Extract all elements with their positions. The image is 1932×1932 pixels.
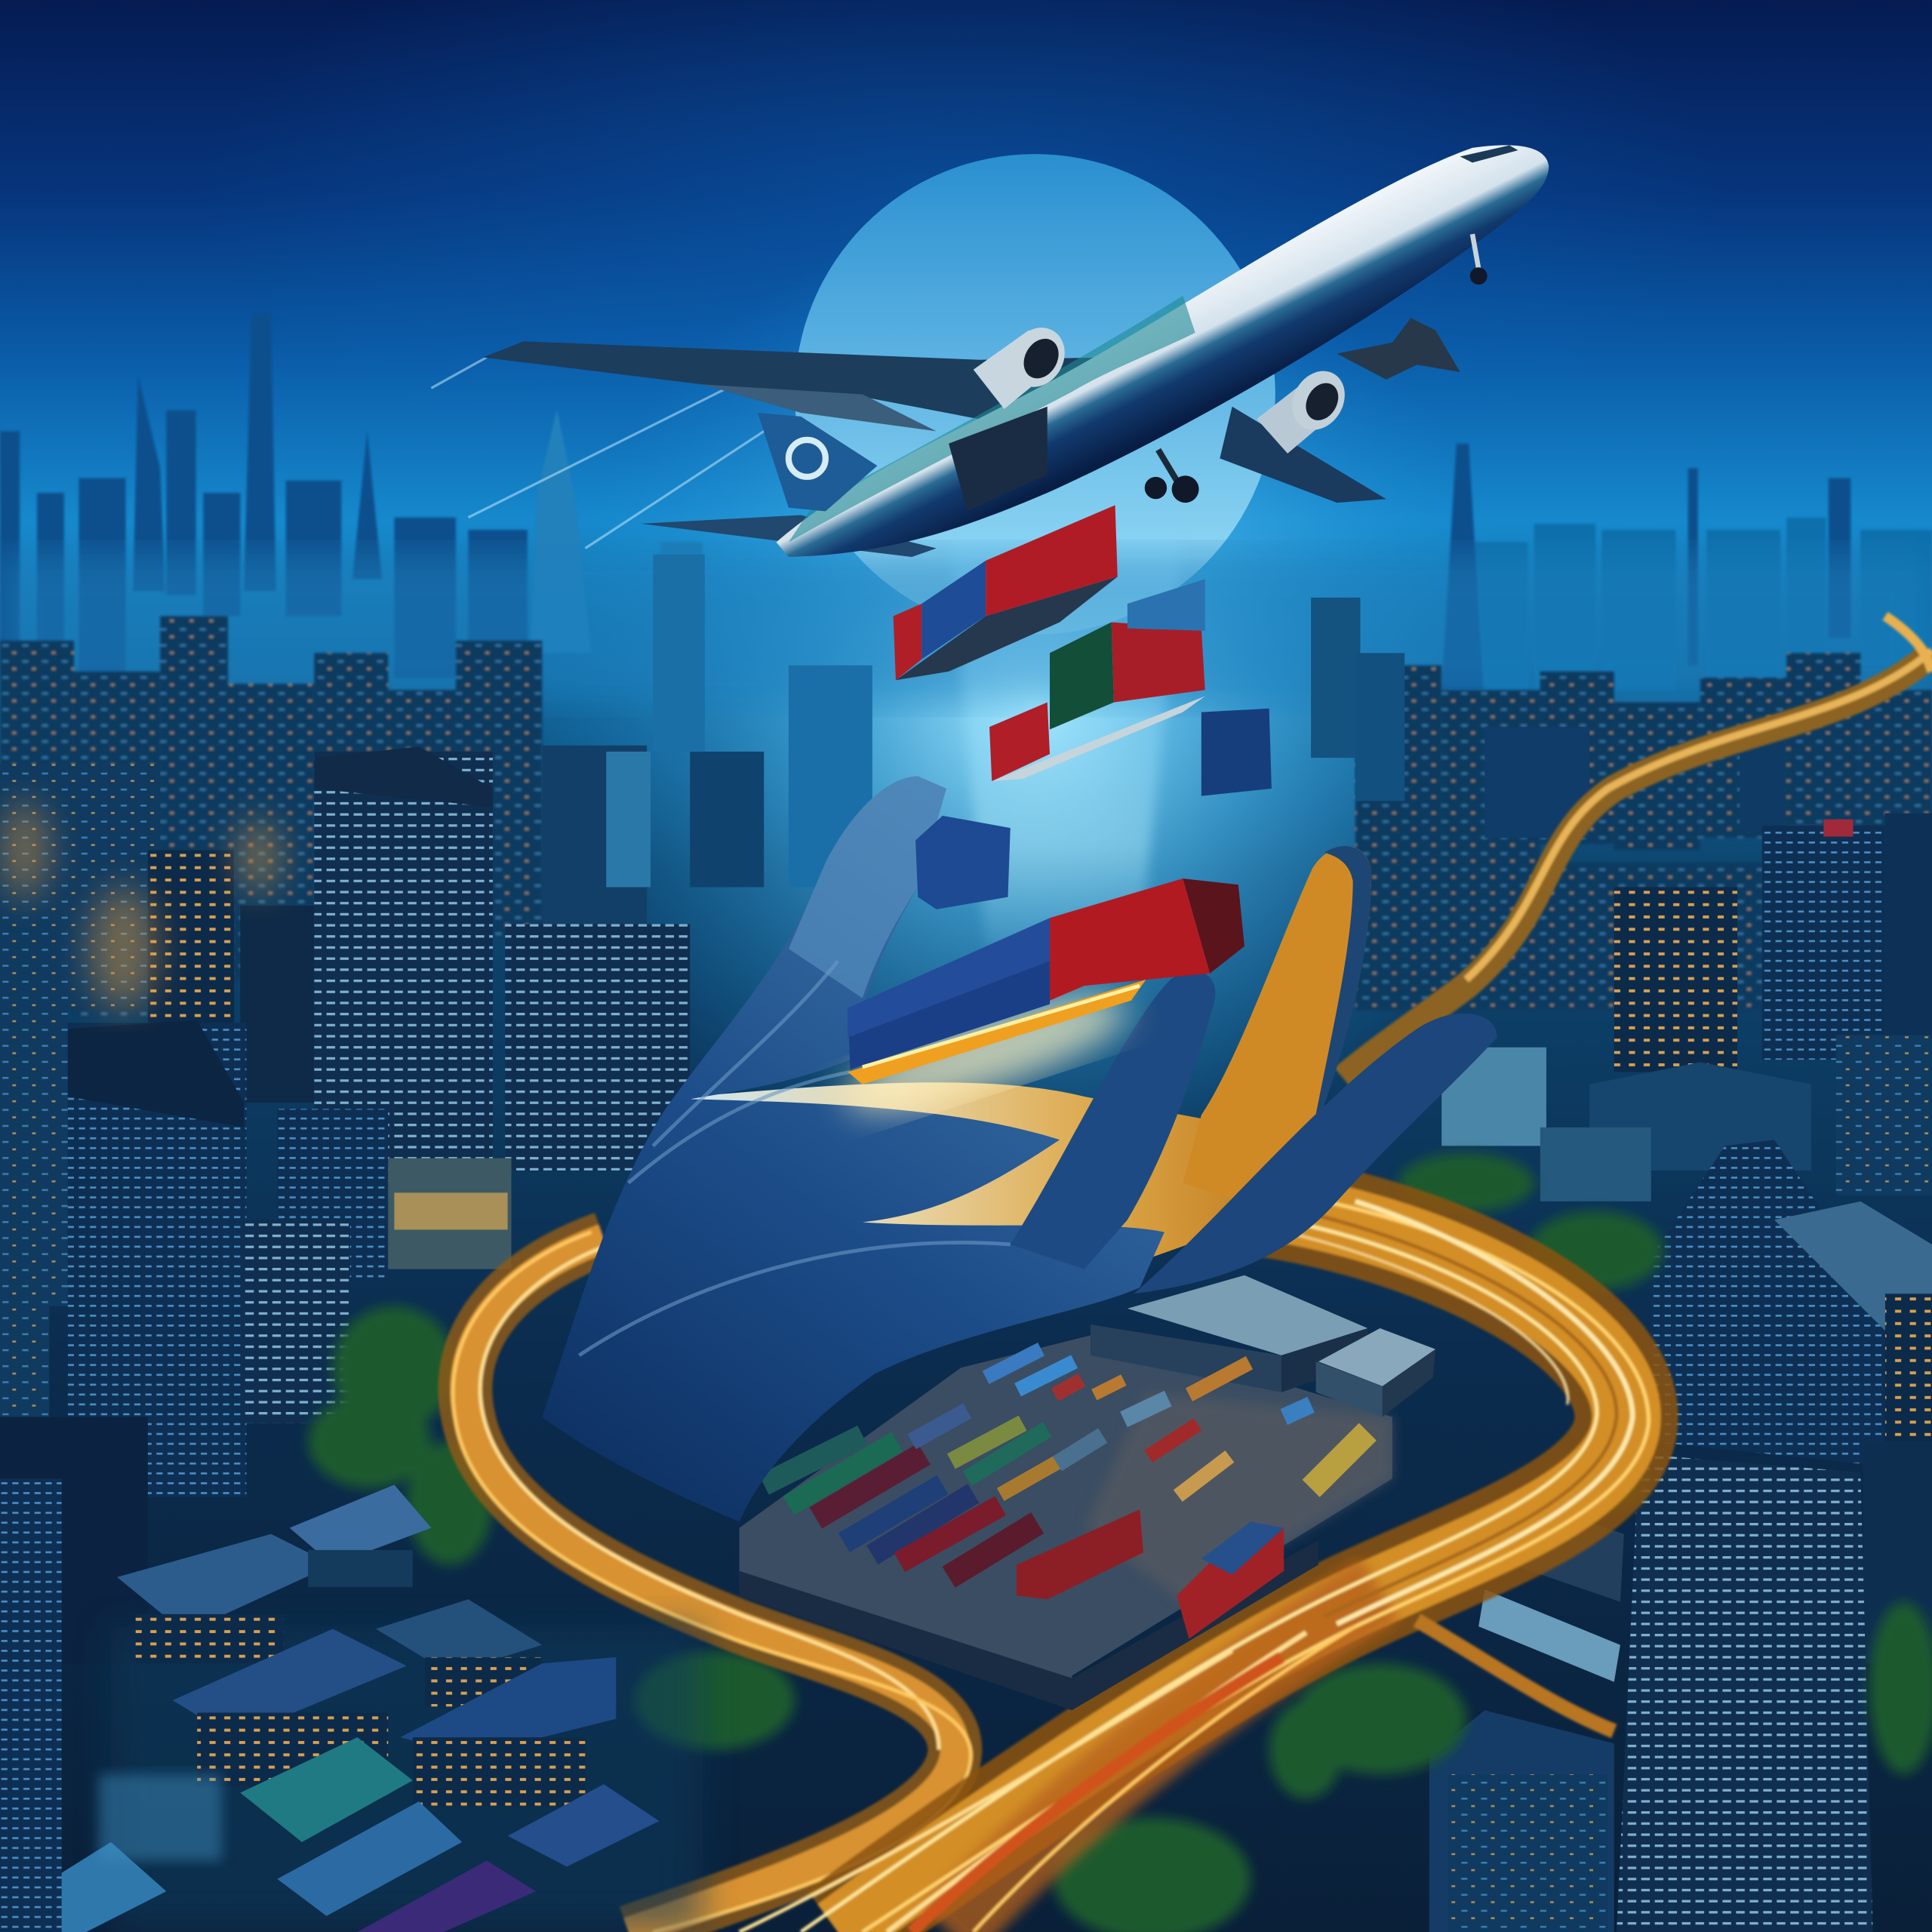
ring finger xyxy=(1134,1014,1497,1294)
far wing xyxy=(1220,407,1386,503)
mid-distance city haze band xyxy=(0,555,1932,703)
cargo bay machinery xyxy=(949,407,1048,512)
tail stabilizer xyxy=(641,515,937,557)
depot front edge xyxy=(740,1540,1318,1710)
near wing xyxy=(483,341,1109,425)
left tower cluster xyxy=(0,746,690,1932)
landing gear xyxy=(1145,234,1487,503)
hand xyxy=(542,777,1497,1521)
glow under container xyxy=(835,975,1137,1132)
large red truck left xyxy=(1017,1509,1143,1599)
index finger xyxy=(1011,971,1215,1269)
moon xyxy=(795,154,1275,635)
distant skyline xyxy=(0,313,1932,715)
upper right elevated highway xyxy=(1343,616,1932,1078)
small jet xyxy=(1337,318,1460,380)
fuselage xyxy=(777,145,1549,557)
hand body xyxy=(542,777,1164,1521)
upper sky brightening xyxy=(197,0,1725,518)
falling container middle xyxy=(989,579,1205,781)
thumb tip translucent xyxy=(789,777,946,998)
small blue container xyxy=(915,816,1011,909)
low-rise warehouses bottom left xyxy=(62,1484,703,1932)
warehouse building xyxy=(1091,1275,1435,1417)
near engine xyxy=(974,318,1075,409)
middle finger xyxy=(1183,846,1371,1214)
trees and greenery xyxy=(308,1153,1932,1932)
cockpit window xyxy=(1460,146,1518,163)
light beam from plane to hand xyxy=(949,530,1183,949)
falling container top xyxy=(894,505,1118,680)
airplane xyxy=(431,145,1549,557)
warm asphalt tone xyxy=(1084,1392,1392,1601)
palm crease highlights xyxy=(579,961,1011,1355)
far engine xyxy=(1257,361,1355,454)
logistics depot yard xyxy=(740,1275,1435,1710)
tail fin xyxy=(758,413,877,512)
warm city glows xyxy=(0,801,281,1011)
falling container blue xyxy=(1201,709,1272,796)
right tower cluster xyxy=(1429,814,1932,1932)
palm glow xyxy=(690,1082,1281,1281)
depot platform xyxy=(740,1331,1392,1710)
large red truck right xyxy=(1177,1521,1284,1638)
middle finger shadow edge xyxy=(1311,846,1371,1140)
teal stripe xyxy=(789,296,1195,542)
contrail streaks xyxy=(431,357,789,549)
mid-distance buildings xyxy=(0,555,1932,1072)
glowing light-trail roads xyxy=(453,1189,1649,1932)
parked trucks xyxy=(764,1349,1367,1577)
central sky glow xyxy=(542,210,1527,1195)
container held by hand xyxy=(848,878,1244,1084)
